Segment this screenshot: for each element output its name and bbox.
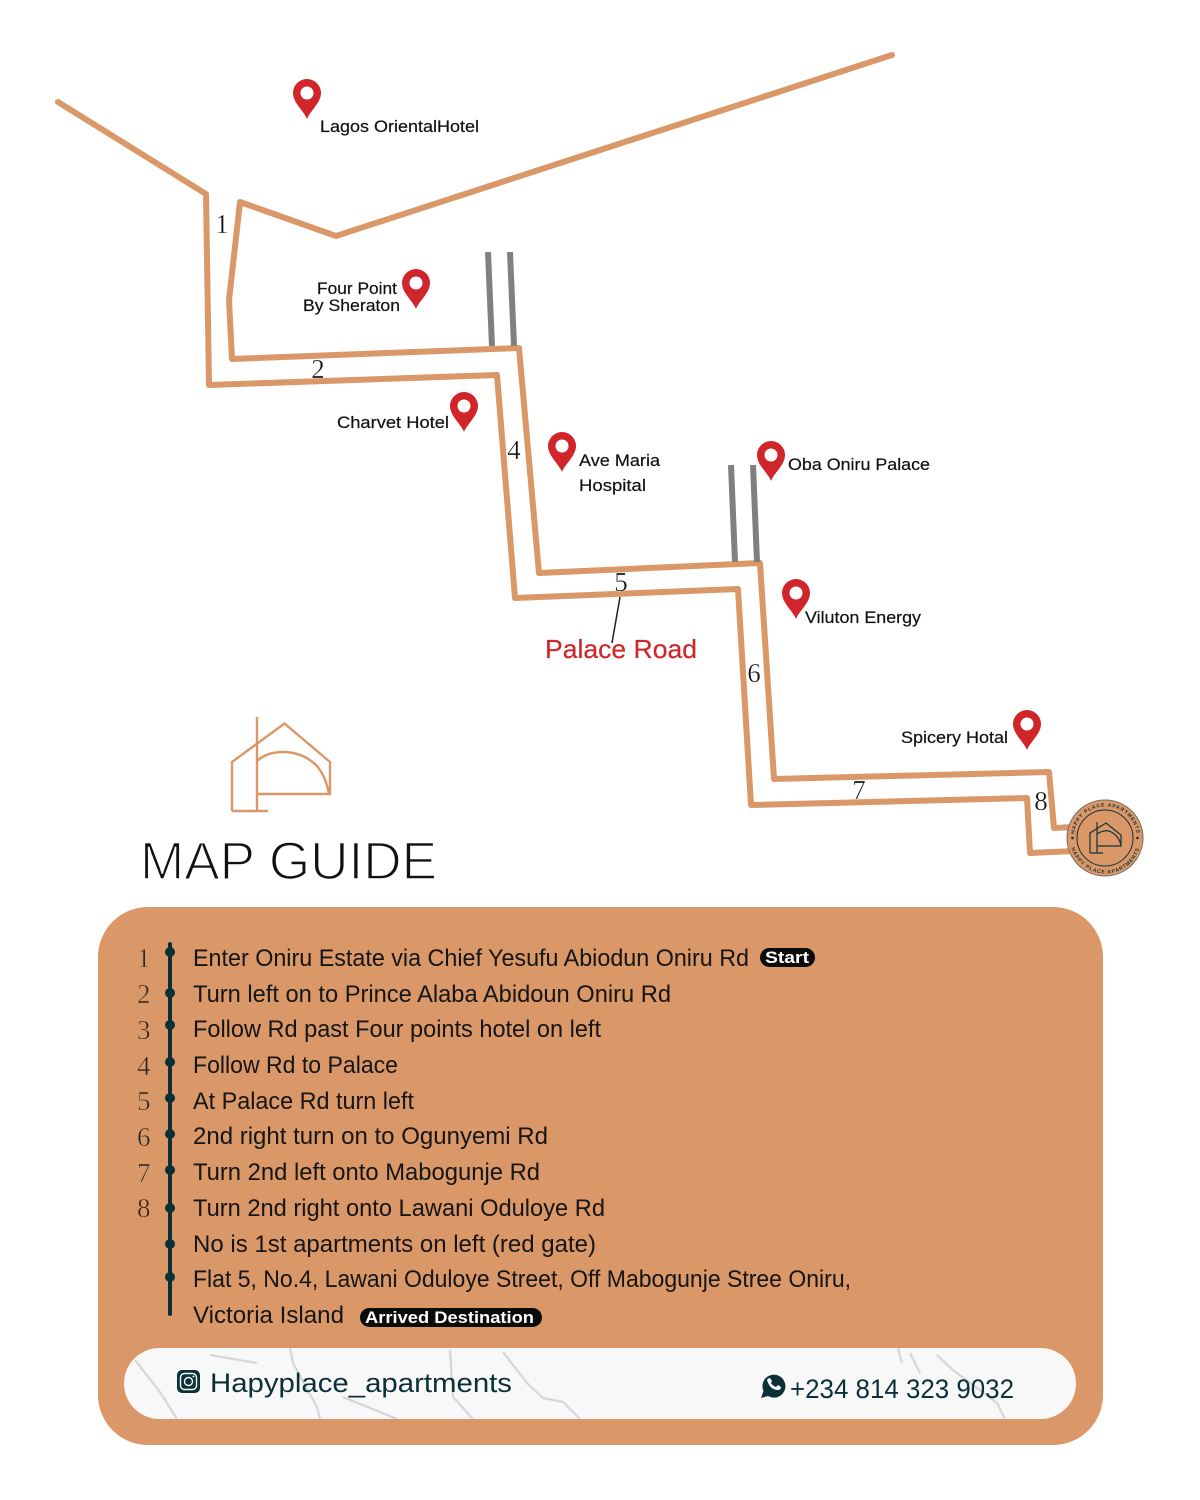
contact bar xyxy=(124,1348,1076,1419)
pin: Four Point By Sheraton: By Sheraton xyxy=(303,296,400,315)
step numbers: 7 xyxy=(137,1158,150,1188)
pin: Charvet Hotel: Charvet Hotel xyxy=(337,413,449,432)
step list: Flat 5, No.4, Lawani Oduloye Street, Off Mabogunje Stree Oniru, xyxy=(193,1266,851,1293)
step list: No is 1st apartments on left (red gate) xyxy=(193,1231,596,1258)
map step numbers: 2 xyxy=(311,354,325,384)
badge: Start: Start xyxy=(765,949,810,967)
map step numbers: 8 xyxy=(1034,786,1048,816)
step list: Turn 2nd right onto Lawani Oduloye Rd xyxy=(193,1195,605,1222)
step list: At Palace Rd turn left xyxy=(193,1088,414,1115)
side road: palace xyxy=(731,465,757,562)
step list: Turn 2nd left onto Mabogunje Rd xyxy=(193,1159,540,1186)
step list: Enter Oniru Estate via Chief Yesufu Abiodun Oniru Rd xyxy=(193,945,749,972)
step list xyxy=(193,945,851,1329)
badge: Arrived Destination: Arrived Destination xyxy=(365,1309,534,1327)
road: lower route xyxy=(58,102,1075,853)
callout: Palace Road xyxy=(545,597,697,664)
destination badge: HAPPY PLACE APARTMENTS xyxy=(1072,847,1139,874)
step list: 2nd right turn on to Ogunyemi Rd xyxy=(193,1123,548,1150)
logo: house outline xyxy=(232,717,330,811)
pin: Spicery Hotal: Spicery Hotal xyxy=(901,728,1008,747)
step numbers xyxy=(137,943,151,1223)
pin: Viluton Energy: Viluton Energy xyxy=(805,608,922,627)
pin: Lagos Oriental Hotel xyxy=(293,79,479,136)
pin: Four Point By Sheraton: Four Point xyxy=(317,279,397,298)
icon: instagram xyxy=(177,1370,200,1393)
step numbers: 6 xyxy=(137,1122,150,1152)
step numbers: 1 xyxy=(137,943,150,973)
map step numbers xyxy=(215,209,1048,816)
map step numbers: 7 xyxy=(852,775,866,805)
map step numbers: 5 xyxy=(614,567,628,597)
callout: Palace Road: Palace Road xyxy=(545,634,697,664)
pin: Charvet Hotel xyxy=(337,392,478,432)
pin: Oba Oniru Palace xyxy=(757,441,930,481)
phone text: +234 814 323 9032 xyxy=(790,1374,1014,1404)
pin: Ave Maria Hospital: Ave Maria xyxy=(579,451,661,470)
step list: Turn left on to Prince Alaba Abidoun Oniru Rd xyxy=(193,981,671,1008)
step numbers: 8 xyxy=(137,1193,150,1223)
pin: Viluton Energy xyxy=(782,579,922,627)
pin: Spicery Hotal xyxy=(901,710,1041,750)
pin: Ave Maria Hospital xyxy=(548,432,661,495)
step numbers: 5 xyxy=(137,1086,150,1116)
timeline xyxy=(165,942,175,1316)
side road: north xyxy=(488,252,514,346)
destination badge: HAPPY PLACE APARTMENTS xyxy=(1070,803,1140,834)
panel: directions xyxy=(98,907,1103,1445)
road: upper route xyxy=(229,55,1075,828)
step list: Follow Rd to Palace xyxy=(193,1052,398,1079)
pin: Four Point By Sheraton xyxy=(303,269,430,315)
handle text: Hapyplace_apartments xyxy=(210,1368,512,1398)
pin: Ave Maria Hospital: Hospital xyxy=(579,476,646,495)
map step numbers: 6 xyxy=(747,658,761,688)
step numbers: 2 xyxy=(137,979,150,1009)
map step numbers: 1 xyxy=(215,209,229,239)
pin: Lagos Oriental Hotel: Lagos OrientalHotel xyxy=(320,117,479,136)
map step numbers: 4 xyxy=(507,435,521,465)
title: MAP GUIDE xyxy=(140,832,437,891)
step numbers: 3 xyxy=(137,1015,150,1045)
badge: Start xyxy=(760,948,815,967)
pin: Oba Oniru Palace: Oba Oniru Palace xyxy=(788,455,930,474)
map: roads xyxy=(58,55,1075,853)
destination badge xyxy=(1066,800,1144,876)
step list: Follow Rd past Four points hotel on left xyxy=(193,1016,601,1043)
step list: Victoria Island xyxy=(193,1302,344,1329)
step numbers: 4 xyxy=(137,1051,151,1081)
icon: whatsapp xyxy=(761,1375,785,1398)
